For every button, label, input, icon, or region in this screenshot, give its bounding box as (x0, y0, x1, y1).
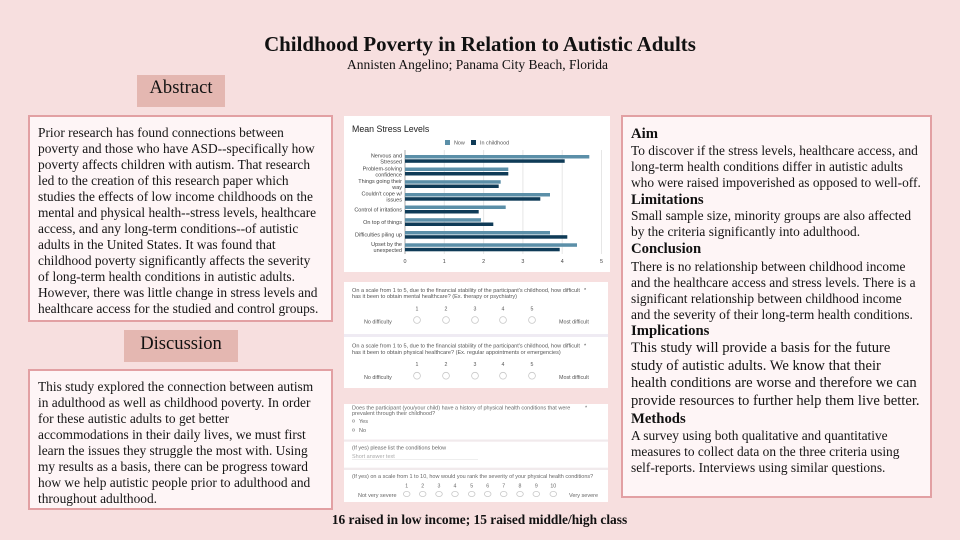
bar chart: mean stress levels: Stressed (380, 160, 402, 166)
survey question: physical healthcare: 3 (474, 362, 477, 368)
aim text (631, 143, 921, 190)
panel: abstract (28, 115, 333, 322)
survey questions: physical health conditions: 6 (486, 484, 489, 490)
methods text (631, 428, 900, 475)
bar chart: mean stress levels: In childhood (480, 140, 509, 146)
survey questions: physical health conditions: * (585, 406, 588, 412)
abstract text: adults in the United States. It was found that (38, 237, 276, 252)
abstract text: mental and physical health--stress levels, healthcare (38, 205, 316, 220)
survey question: mental healthcare: Most difficult (559, 320, 589, 326)
survey questions: physical health conditions: 4 (454, 484, 457, 490)
conclusion text: and the healthcare access and stress levels. There is a (631, 275, 916, 290)
survey questions: physical health conditions: (If yes) on a scale from 1 to 10, how would you rank the severity of your physical health conditions? (352, 474, 593, 480)
bar chart: mean stress levels: 5 (600, 259, 603, 265)
survey questions: physical health conditions: 2 (421, 484, 424, 490)
bar chart: mean stress levels: Difficulties piling up (355, 232, 402, 238)
heading: abstract: Abstract (150, 77, 212, 98)
bar chart: mean stress levels: Things going their (358, 179, 402, 185)
survey questions: physical health conditions: 8 (519, 484, 522, 490)
bar chart: mean stress levels: Now (454, 140, 465, 146)
discussion text: learn the issues they struggle the most with. Using (38, 443, 308, 458)
abstract text: of long-term health conditions in autistic adults. (38, 269, 295, 284)
bar chart: mean stress levels: 3 (521, 259, 524, 265)
survey question: physical healthcare: 1 (416, 362, 419, 368)
aim text: To discover if the stress levels, healthcare access, and (631, 143, 918, 158)
abstract text: However, there was little change in stress levels and (38, 285, 317, 300)
survey question: mental healthcare: 5 (531, 306, 534, 312)
implications text: provide resources to further help them live better. (631, 393, 920, 409)
survey questions: physical health conditions: Yes (359, 419, 368, 425)
bar chart: mean stress levels: issues (386, 198, 402, 204)
survey questions: physical health conditions (344, 404, 608, 502)
footer: sample size note: 16 raised in low income; 15 raised middle/high class (332, 512, 627, 527)
bar chart: mean stress levels: Upset by the (371, 242, 402, 248)
abstract text: access, and any long-term conditions--of autistic (38, 221, 298, 236)
abstract text: healthcare access for the studied and control groups. (38, 301, 318, 316)
survey question: mental healthcare: 4 (502, 306, 505, 312)
implications text: study of autistic adults. We know that their (631, 358, 881, 374)
aim text: who were raised impoverished as opposed to well-off. (631, 175, 921, 190)
heading: implications: Implications (631, 323, 709, 339)
discussion text: accommodations in their daily lives, we must first (38, 427, 306, 442)
survey question: physical healthcare: Most difficult (559, 375, 589, 381)
discussion text: throughout adulthood. (38, 491, 157, 506)
bar chart: mean stress levels: Mean Stress Levels (352, 124, 430, 134)
implications text: This study will provide a basis for the future (631, 340, 890, 356)
abstract text (38, 125, 318, 316)
implications text (631, 340, 920, 409)
heading: limitations: Limitations (631, 192, 704, 208)
conclusion text: significant relationship between childhood income (631, 291, 902, 306)
survey question: physical healthcare: On a scale from 1 to 5, due to the financial stability of the participant's childhood, how difficult (352, 344, 580, 350)
survey question: physical healthcare: No difficulty (364, 375, 392, 381)
survey question: mental healthcare: * (584, 288, 587, 294)
survey question: mental healthcare: 2 (445, 306, 448, 312)
aim text: long-term health conditions differ in autistic adults (631, 159, 903, 174)
abstract text: led to the creation of this research paper which (38, 173, 289, 188)
bar chart: mean stress levels: unexpected (374, 248, 402, 254)
survey questions: physical health conditions: 10 (550, 484, 556, 490)
survey question: mental healthcare: No difficulty (364, 320, 392, 326)
survey question: physical healthcare (344, 337, 608, 388)
survey question: mental healthcare (344, 282, 608, 334)
panel: aim, limitations, conclusion, implications, methods (621, 115, 932, 498)
survey question: physical healthcare: 5 (531, 362, 534, 368)
survey questions: physical health conditions: (If yes) please list the conditions below (352, 446, 446, 452)
survey questions: physical health conditions: Short answer text (352, 454, 395, 460)
survey question: mental healthcare: On a scale from 1 to 5, due to the financial stability of the participant's childhood, how difficult (352, 288, 580, 294)
abstract text: poverty affects children with autism. That research (38, 157, 310, 172)
discussion text (38, 379, 313, 506)
survey question: physical healthcare: * (584, 344, 587, 350)
bar chart: mean stress levels: 4 (561, 259, 564, 265)
methods text: self-reports. Interviews using similar questions. (631, 460, 885, 475)
abstract text: poverty and those who have ASD--specifically how (38, 141, 315, 156)
survey questions: physical health conditions: Does the participant (you/your child) have a history of physical health conditions that were (352, 406, 570, 412)
panel: discussion (28, 369, 333, 510)
survey question: mental healthcare: has it been to obtain mental healthcare? (Ex. therapy or psychiatry) (352, 294, 517, 300)
bar chart: mean stress levels: 0 (404, 259, 406, 265)
survey questions: physical health conditions: 7 (502, 484, 505, 490)
bar chart: mean stress levels: Nervous and (371, 154, 402, 160)
discussion text: how we help autistic people prior to adulthood and (38, 475, 310, 490)
discussion text: in adulthood as well as childhood poverty. In order (38, 395, 310, 410)
conclusion text (631, 259, 916, 322)
bar chart: mean stress levels: Problem-solving (363, 166, 402, 172)
survey question: physical healthcare: has it been to obtain physical healthcare? (Ex. regular appointments or emergencies) (352, 350, 561, 356)
survey questions: physical health conditions: Very severe (569, 493, 598, 499)
conclusion text: There is no relationship between childhood income (631, 259, 905, 274)
implications text: health conditions are worse and therefore we can (631, 375, 917, 391)
heading: methods: Methods (631, 411, 686, 427)
survey questions: physical health conditions: 1 (405, 484, 408, 490)
divider strip between survey questions (344, 334, 608, 337)
heading: conclusion: Conclusion (631, 241, 701, 257)
abstract text: Prior research has found connections between (38, 125, 284, 140)
survey question: mental healthcare: 1 (416, 306, 419, 312)
bar chart: mean stress levels: way (391, 185, 402, 191)
survey questions: physical health conditions: 5 (470, 484, 473, 490)
bar chart: mean stress levels: On top of things (363, 220, 402, 226)
bar chart: mean stress levels: Control of irritations (354, 208, 402, 214)
survey question: physical healthcare: 4 (502, 362, 505, 368)
discussion text: my results as a basis, there can be progress toward (38, 459, 308, 474)
heading: abstract (137, 75, 225, 107)
methods text: A survey using both qualitative and quantitative (631, 428, 888, 443)
abstract text: childhood poverty significantly affects the severity (38, 253, 310, 268)
methods text: measures to collect data on the three criteria using (631, 444, 899, 459)
limitations text: by the criteria significantly into adulthood. (631, 224, 860, 239)
conclusion text: and the severity of their long-term health conditions. (631, 307, 913, 322)
heading: discussion (124, 330, 238, 362)
survey question: mental healthcare: 3 (474, 306, 477, 312)
survey questions: physical health conditions: 9 (535, 484, 538, 490)
discussion text: for these autistic adults to get better (38, 411, 229, 426)
title: Childhood Poverty in Relation to Autistic Adults (264, 32, 696, 56)
limitations text: Small sample size, minority groups are also affected (631, 208, 911, 223)
limitations text (631, 208, 911, 239)
survey questions: physical health conditions: 3 (438, 484, 441, 490)
bar chart: mean stress levels: confidence (375, 172, 402, 178)
survey questions: physical health conditions: No (359, 428, 366, 434)
bar chart: mean stress levels (344, 116, 610, 272)
author line: Annisten Angelino; Panama City Beach, Florida (347, 57, 608, 72)
bar chart: mean stress levels: Couldn't cope w/ (362, 192, 402, 198)
bar chart: mean stress levels: 2 (482, 259, 485, 265)
discussion text: This study explored the connection between autism (38, 379, 313, 394)
survey questions: physical health conditions: prevalent through their childhood? (352, 411, 435, 417)
survey questions: physical health conditions: Not very severe (358, 493, 397, 499)
heading: discussion: Discussion (140, 333, 222, 354)
heading: aim: Aim (631, 126, 658, 142)
bar chart: mean stress levels: 1 (443, 259, 446, 265)
abstract text: studies the effects of low income childhoods on the (38, 189, 313, 204)
survey question: physical healthcare: 2 (445, 362, 448, 368)
